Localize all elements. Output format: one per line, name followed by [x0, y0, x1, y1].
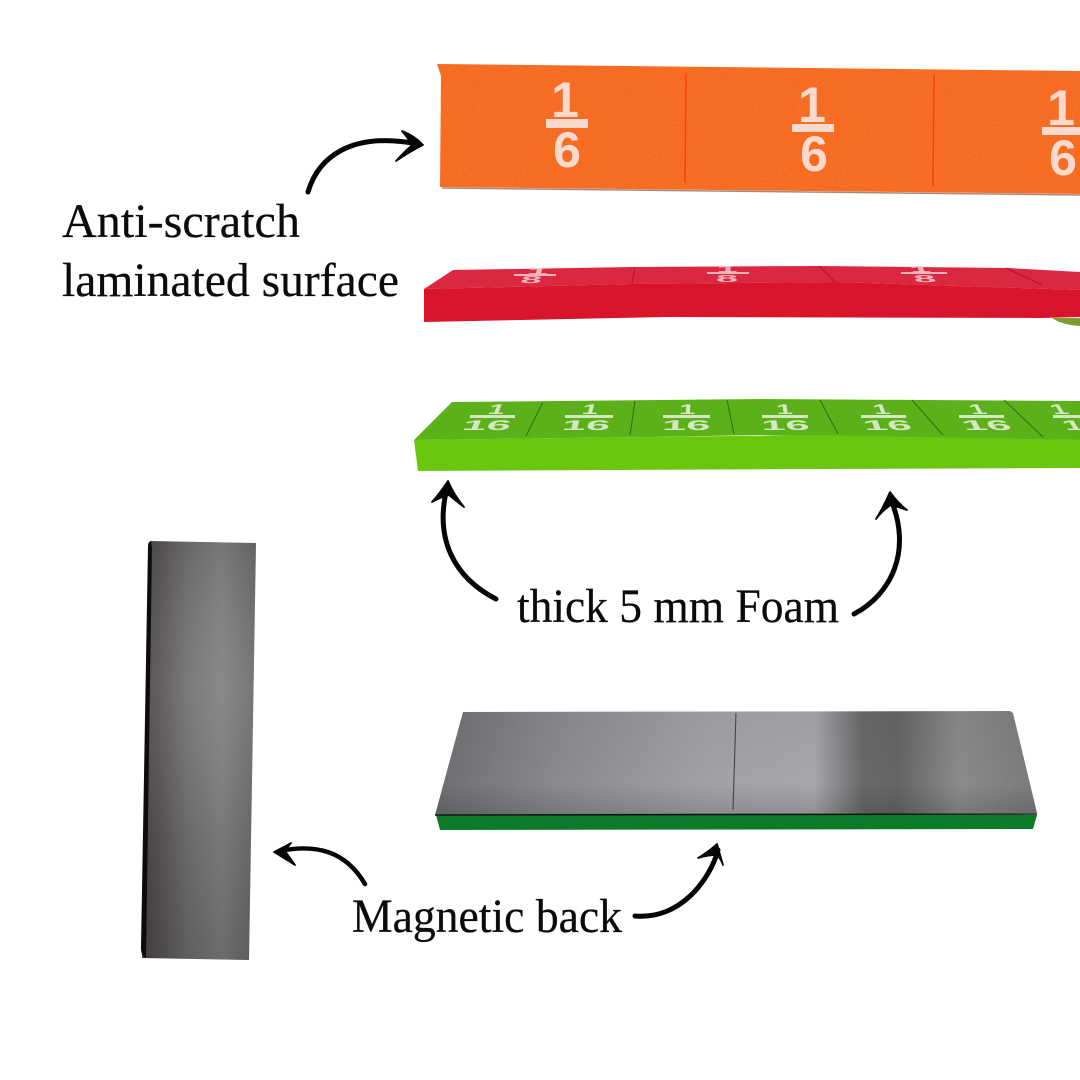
panel: green 1/16 strip: 16: [760, 417, 811, 433]
panel: green 1/16 strip: [414, 399, 1080, 471]
panel: horizontal magnetic back strip: [435, 711, 1037, 830]
panel: red 1/8 strip: 8: [716, 273, 738, 284]
panel: orange 1/6 strip: 6: [800, 126, 828, 182]
panel: orange 1/6 strip: 1: [1047, 80, 1075, 136]
panel: orange 1/6 strip: 1: [798, 77, 826, 133]
panel: vertical magnetic back strip: [141, 541, 256, 960]
panel: orange 1/6 strip: 1: [551, 72, 579, 128]
arrow: to laminated surface: [308, 131, 423, 192]
panel: green 1/16 strip: 1: [580, 401, 600, 417]
panel: green 1/16 strip: 16: [860, 417, 914, 433]
panel: red 1/8 strip: 1: [908, 264, 932, 274]
panel: red 1/8 strip: 1: [526, 266, 550, 276]
arrow: foam thickness left: [432, 481, 496, 599]
panel: orange 1/6 strip: [437, 64, 1080, 195]
heading: foam label: thick 5 mm Foam: [517, 580, 839, 633]
panel: orange 1/6 strip: 6: [553, 122, 581, 178]
panel: green 1/16 strip: 16: [958, 417, 1015, 433]
heading: anti-scratch label: Anti-scratch: [62, 195, 300, 248]
panel: green 1/16 strip: 1: [486, 401, 508, 417]
panel: green 1/16 strip: 16: [560, 417, 612, 433]
panel: green 1/16 strip: 1: [1046, 402, 1072, 418]
arrow: magnetic back left: [274, 843, 365, 884]
panel: green 1/16 strip: 1: [870, 401, 892, 417]
panel: red 1/8 strip: 8: [912, 273, 938, 284]
panel: green 1/16 strip: 16: [662, 417, 711, 433]
panel: green 1/16 strip: 1: [775, 401, 794, 417]
heading: laminated surface label: laminated surface: [62, 254, 399, 307]
panel: green 1/16 strip: 1: [966, 402, 990, 418]
arrow: foam thickness right: [854, 492, 907, 614]
panel: red 1/8 strip: [424, 264, 1080, 326]
heading: magnetic back label: Magnetic back: [352, 890, 622, 943]
panel: green 1/16 strip: 16: [460, 418, 514, 433]
arrow: magnetic back right: [635, 844, 723, 916]
panel: red 1/8 strip: 8: [519, 274, 544, 285]
panel: green 1/16 strip: 1: [679, 401, 696, 417]
panel: orange 1/6 strip: 6: [1049, 130, 1077, 186]
panel: red 1/8 strip: 1: [716, 264, 738, 274]
